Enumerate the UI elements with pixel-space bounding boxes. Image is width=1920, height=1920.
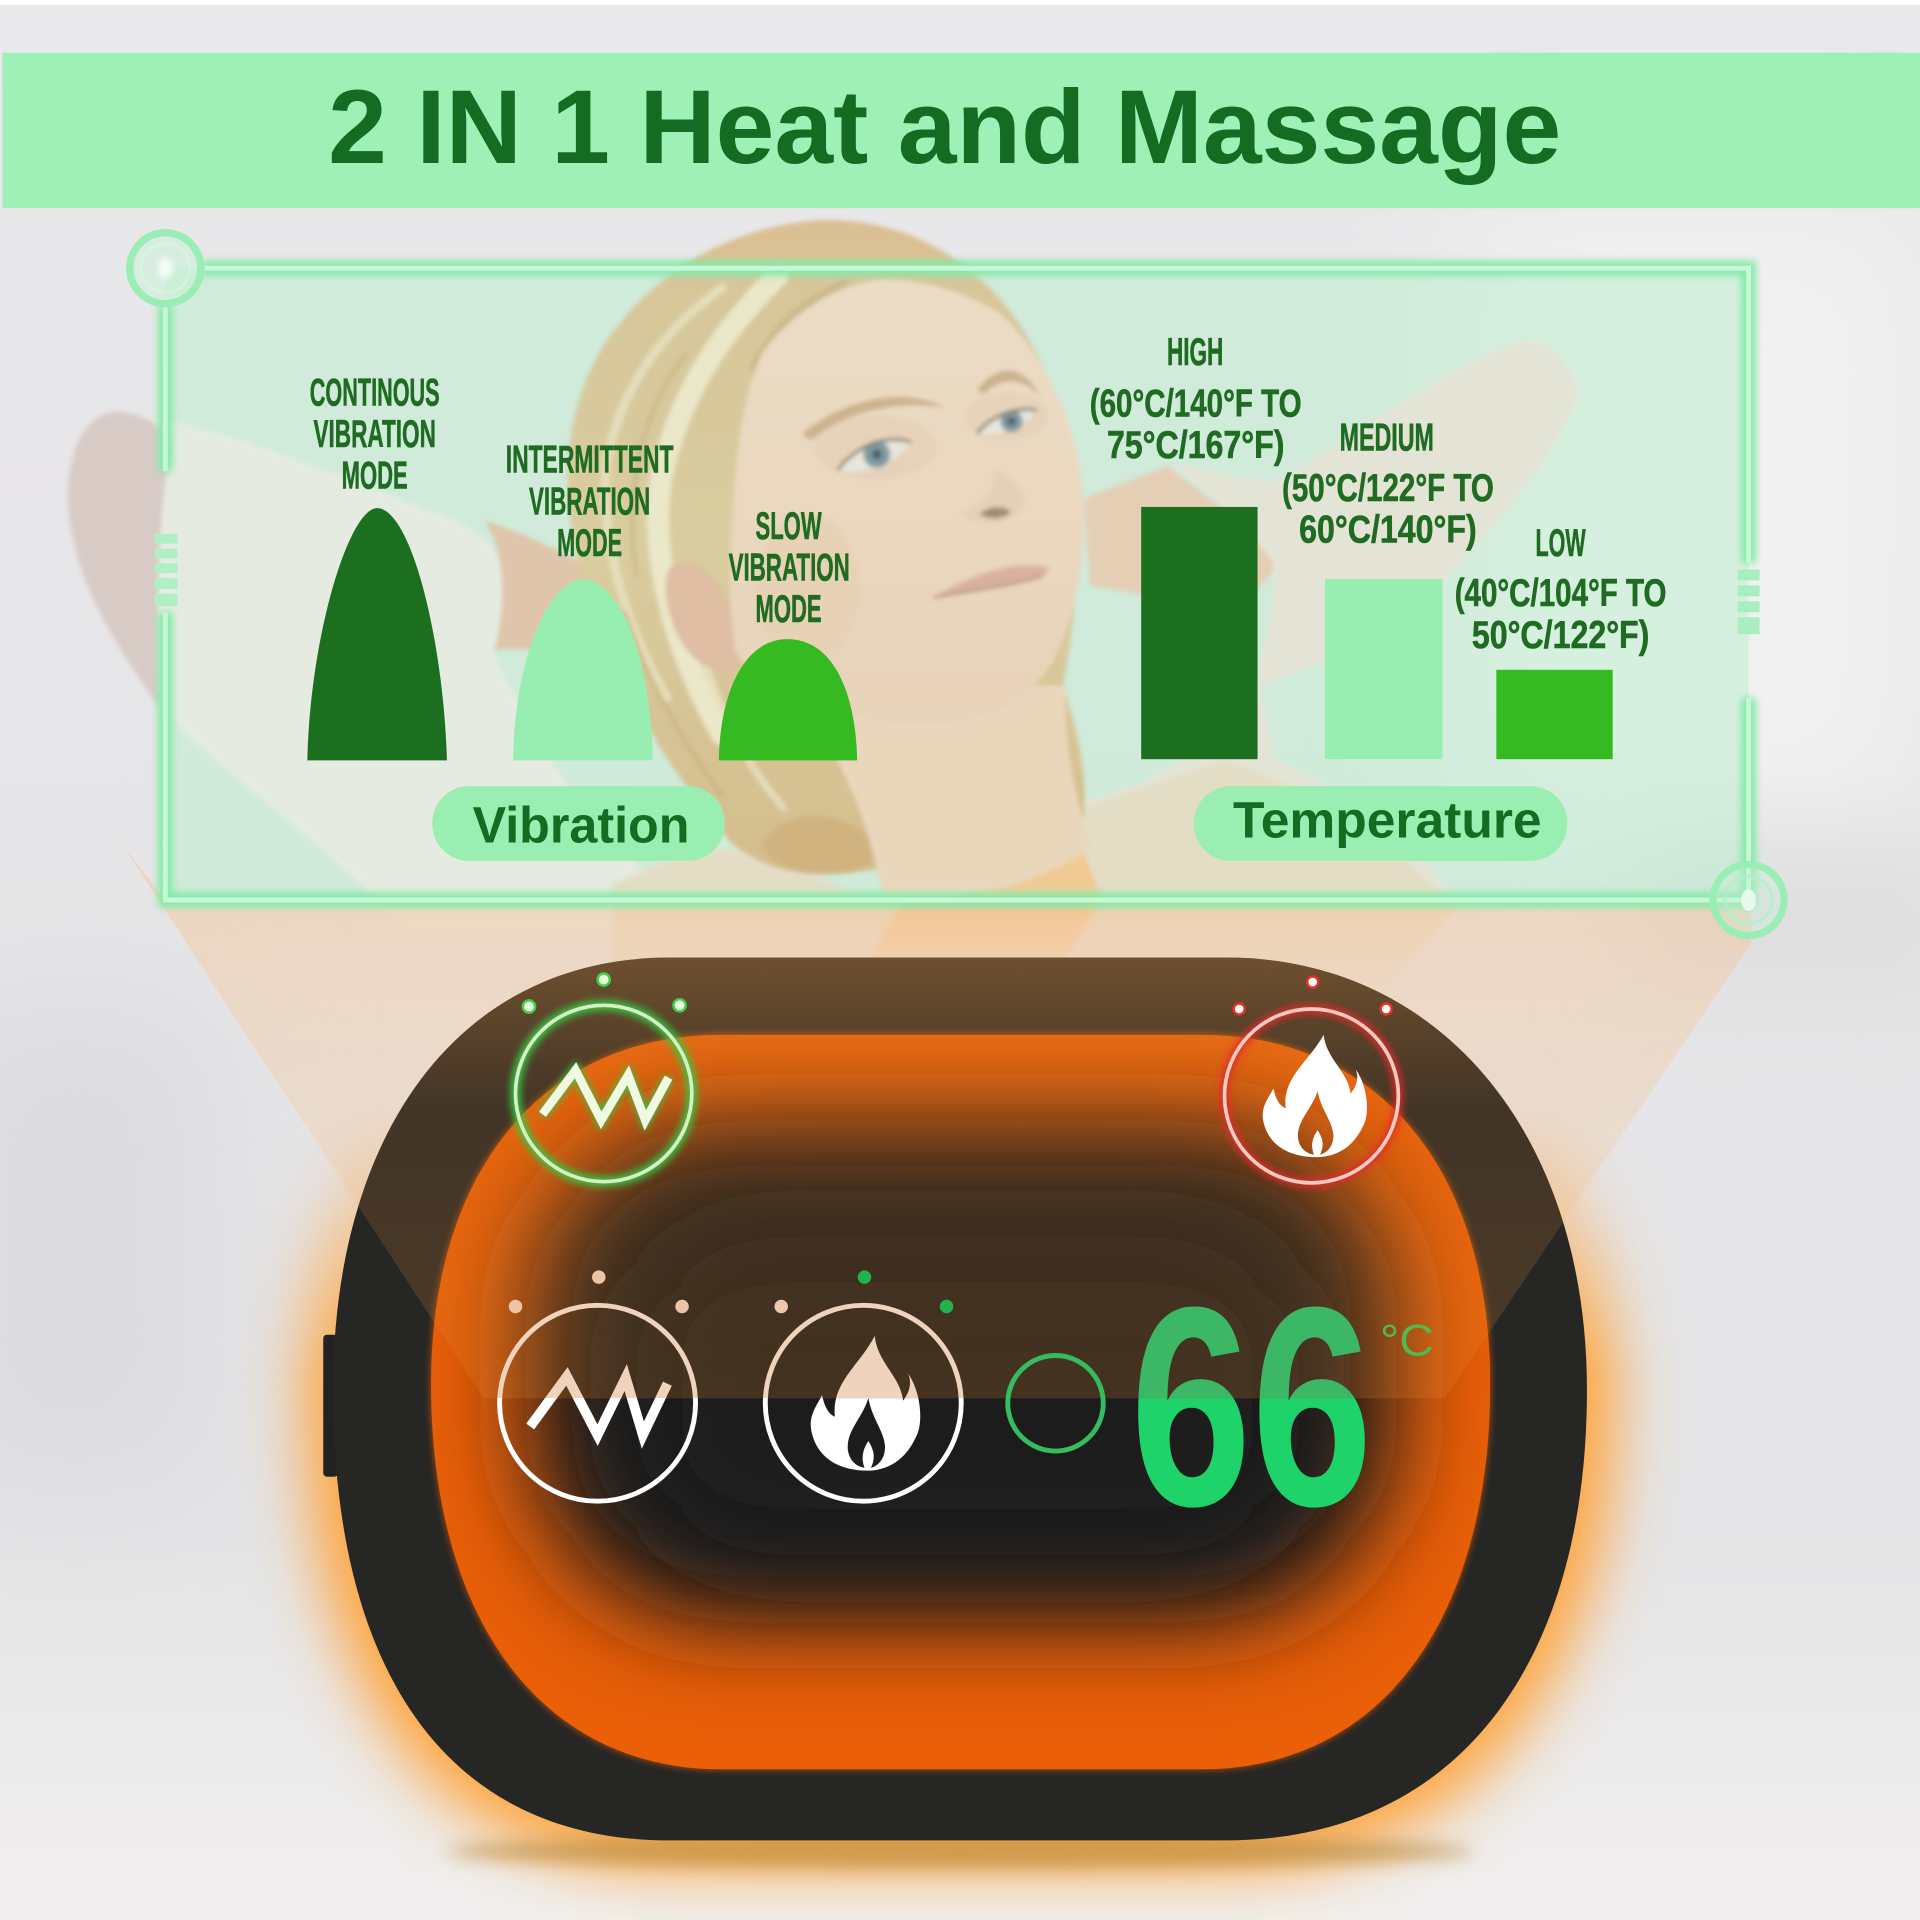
massager device	[122, 845, 1751, 1840]
medium label: (50°C/122°F TO	[1282, 467, 1494, 510]
frame core line	[165, 268, 1749, 900]
medium label: MEDIUM	[1340, 417, 1434, 460]
right eye	[977, 409, 1037, 434]
low bar	[1496, 670, 1613, 759]
slow mode wave	[719, 639, 857, 760]
medium bar	[1325, 579, 1442, 759]
left forearm	[484, 520, 671, 673]
neck	[796, 686, 1092, 901]
intermittent mode label: INTERMITTENT	[506, 439, 674, 482]
torso sweater	[612, 760, 1452, 970]
peach shirt	[870, 852, 1100, 958]
intermittent mode wave	[513, 579, 653, 760]
hair light strands	[605, 276, 784, 808]
device body	[333, 958, 1587, 1840]
nose	[961, 468, 1026, 524]
continuous mode wave	[307, 508, 447, 760]
hair back	[568, 220, 1085, 874]
high label: (60°C/140°F TO	[1090, 382, 1302, 425]
right brow	[977, 370, 1041, 397]
unit: °C	[1380, 1317, 1434, 1366]
slow mode label	[729, 505, 850, 631]
frame glow	[165, 268, 1749, 900]
vibration level button	[500, 1270, 696, 1501]
orange glow around device	[333, 958, 1587, 1840]
right forearm	[1084, 465, 1286, 612]
beam reflected on device	[122, 845, 1751, 1398]
title banner	[0, 0, 1920, 208]
continuous mode label	[310, 371, 440, 498]
vibration pill: Vibration	[473, 795, 689, 853]
continuous mode label: MODE	[342, 455, 408, 498]
panel tint under the figure	[165, 268, 1749, 900]
woman	[67, 220, 1578, 992]
active heat button	[1224, 977, 1398, 1183]
intermittent mode label: MODE	[557, 522, 622, 565]
low label: (40°C/104°F TO	[1455, 572, 1667, 615]
heated orange panel	[431, 1035, 1490, 1769]
slow mode label: VIBRATION	[729, 546, 850, 589]
low label: LOW	[1536, 522, 1586, 565]
temperature pill: Temperature	[1233, 791, 1542, 849]
temperature pill	[1194, 786, 1567, 861]
top-left node	[130, 233, 201, 304]
low label: 50°C/122°F)	[1472, 614, 1649, 657]
power ring	[1008, 1356, 1103, 1451]
hologram panel	[130, 233, 1784, 936]
medium label	[1282, 417, 1494, 551]
temperature readout: 66	[1130, 1249, 1373, 1566]
title: 2 IN 1 Heat and Massage	[328, 69, 1561, 186]
slow mode label: SLOW	[756, 505, 822, 548]
right sleeve	[1085, 341, 1578, 893]
eye socket shading	[814, 415, 937, 479]
left eye	[838, 440, 911, 472]
high label: 75°C/167°F)	[1107, 424, 1284, 467]
device shadow	[446, 1834, 1474, 1869]
ear	[666, 562, 742, 672]
continuous mode label: CONTINOUS	[310, 371, 440, 414]
projection beam behind device	[122, 845, 1751, 1398]
medium label: 60°C/140°F)	[1299, 508, 1477, 551]
right ticks	[1738, 569, 1760, 634]
hair curl	[762, 817, 874, 873]
bottom-right node	[1713, 864, 1784, 936]
continuous mode label: VIBRATION	[313, 413, 436, 456]
cheek shading	[757, 514, 860, 661]
vibration pill	[432, 786, 725, 861]
intermittent mode label	[506, 439, 674, 565]
left elbow	[67, 411, 171, 708]
high label: HIGH	[1167, 331, 1223, 374]
low label	[1455, 522, 1667, 657]
intermittent mode label: VIBRATION	[529, 480, 650, 523]
lips	[931, 565, 1049, 599]
faint tint over figure	[165, 268, 1749, 900]
heat level button	[765, 1270, 961, 1501]
side button	[323, 1335, 338, 1477]
high label	[1090, 331, 1302, 467]
temperature chart	[1090, 331, 1667, 861]
left ticks	[154, 534, 178, 606]
active vibration button	[516, 973, 692, 1182]
hair shadow strands	[624, 282, 845, 796]
heat level dots	[774, 1270, 953, 1313]
left brow	[802, 397, 945, 441]
vibration chart	[307, 371, 857, 861]
left sleeve	[164, 422, 640, 894]
slow mode label: MODE	[756, 588, 822, 631]
face	[730, 279, 1084, 725]
high bar	[1141, 507, 1258, 759]
